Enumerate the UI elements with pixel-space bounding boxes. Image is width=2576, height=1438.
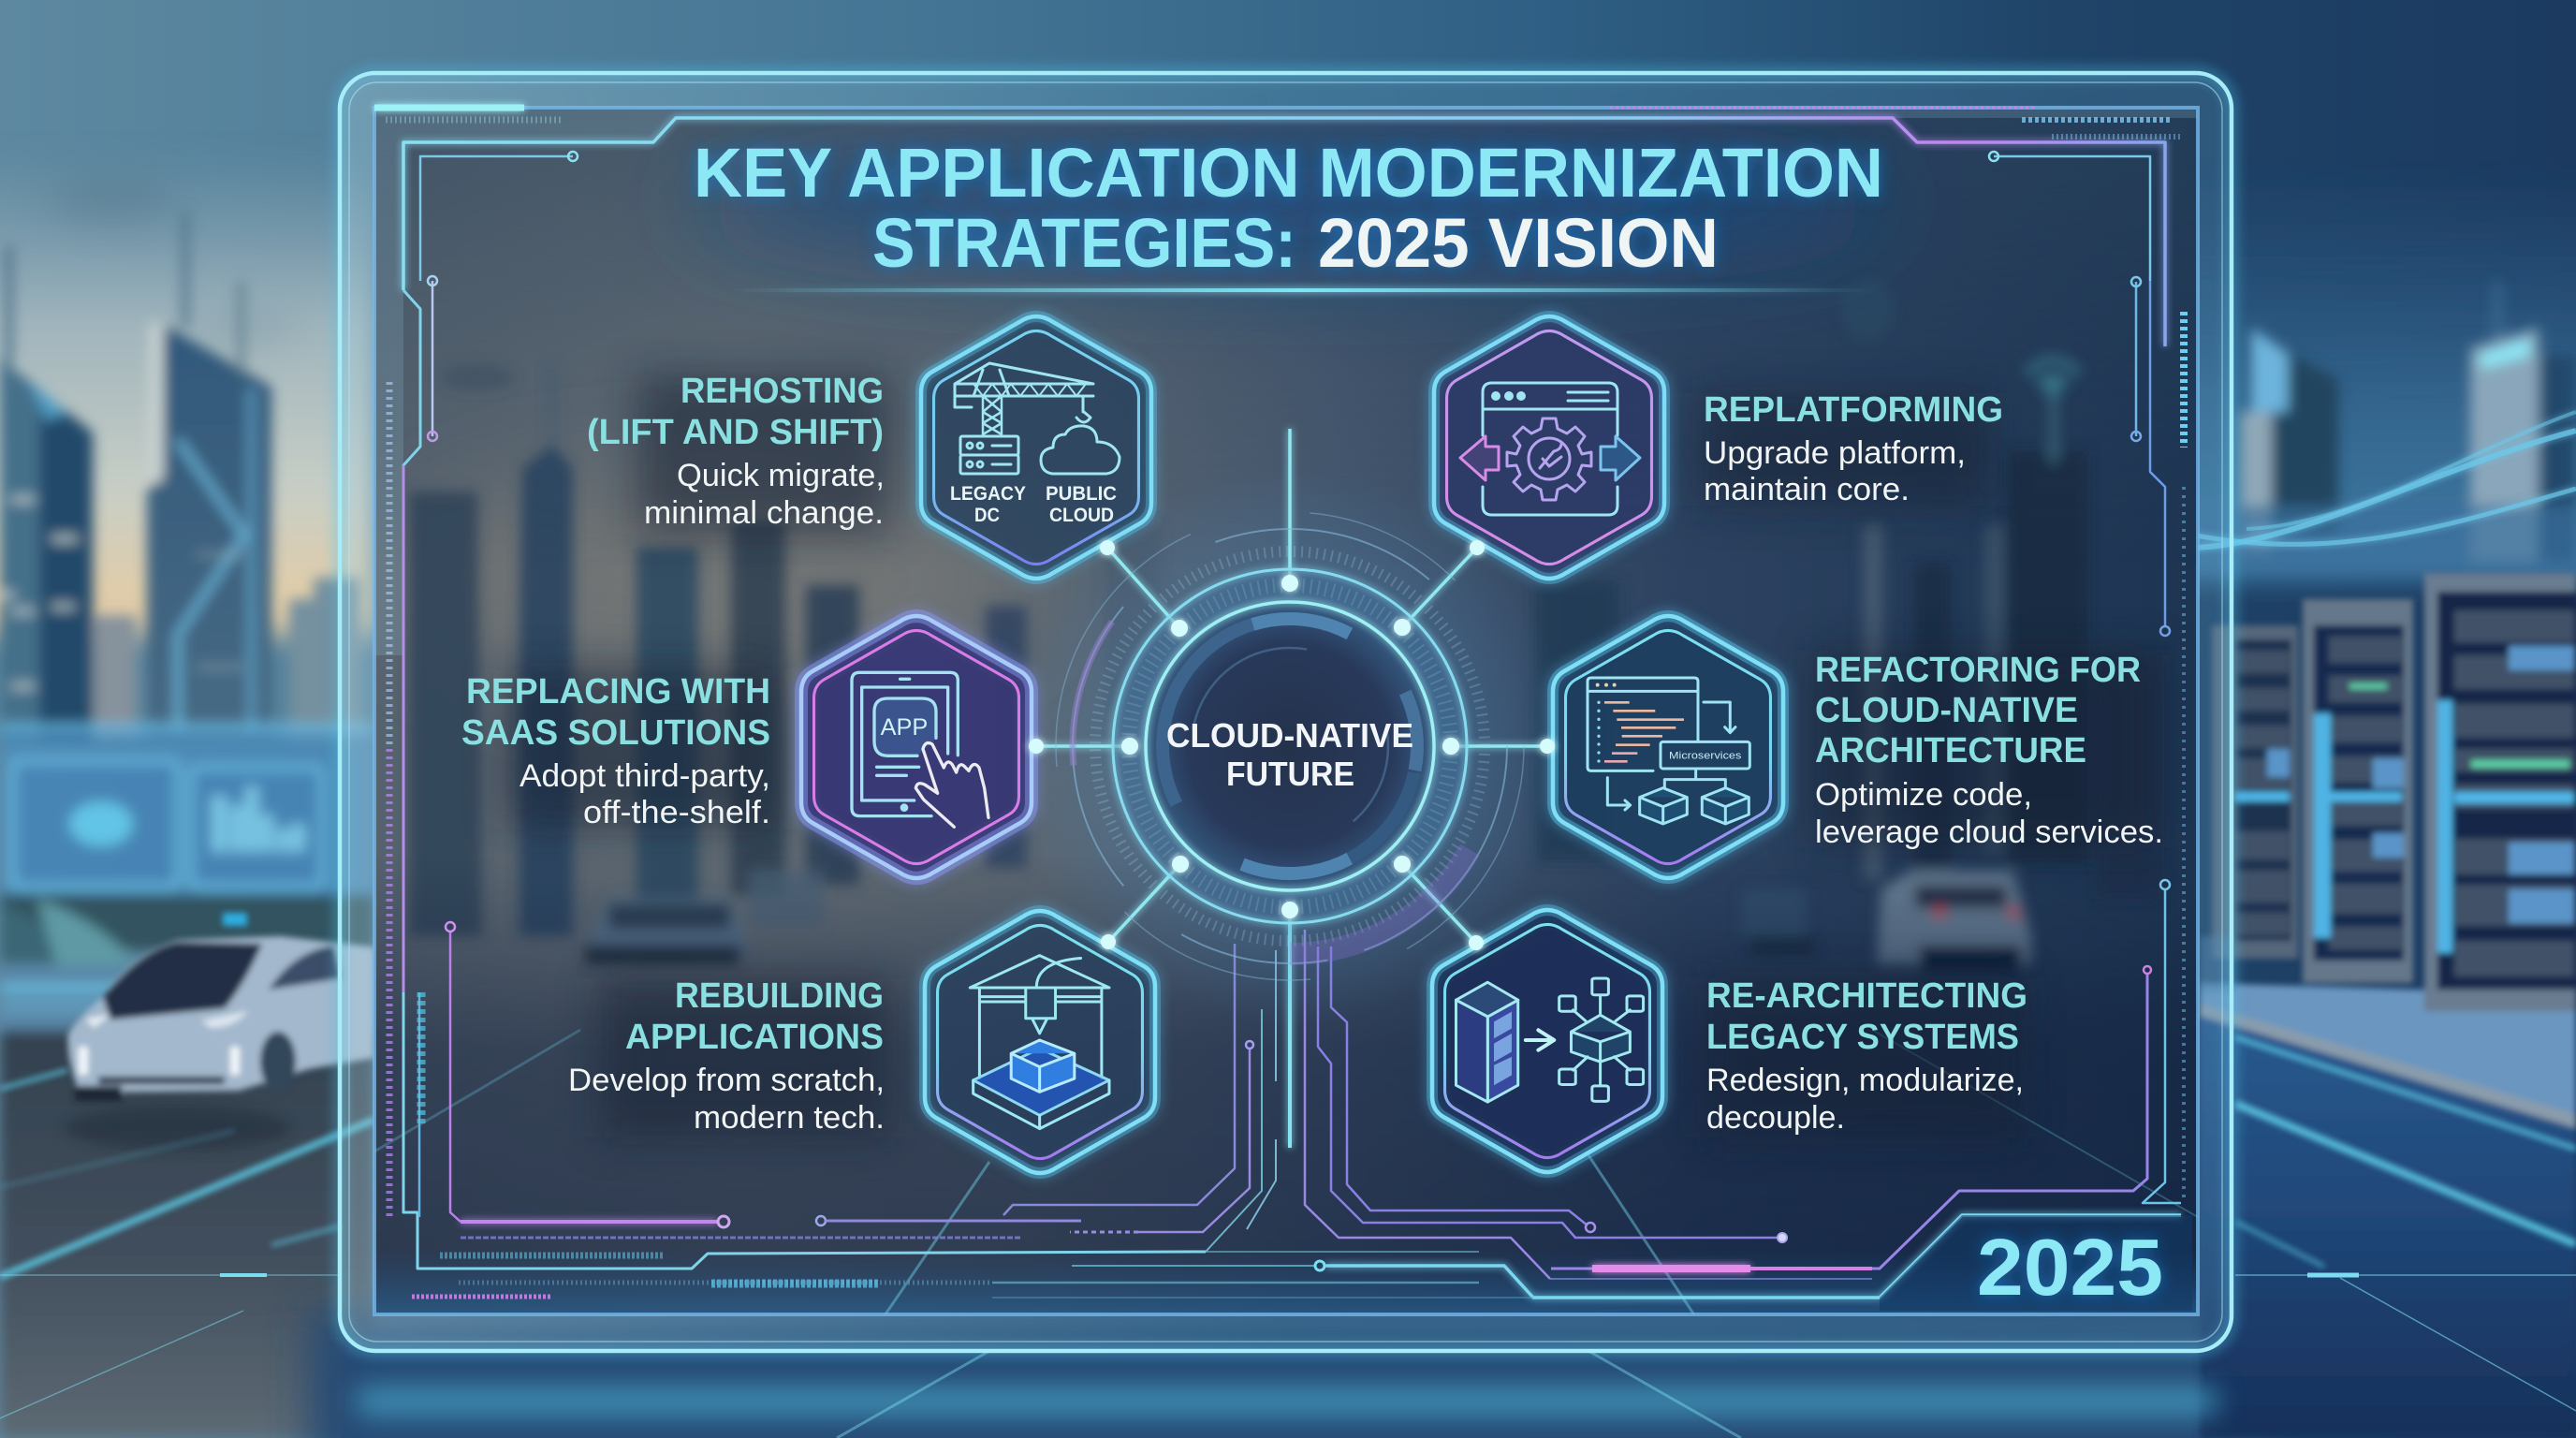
year badge	[1880, 1215, 2192, 1313]
strategy: refactoring	[1553, 616, 2163, 878]
hub glow and connector lines	[1009, 429, 1571, 1027]
racks	[2200, 983, 2576, 1123]
year badge: 2025	[1977, 1224, 2163, 1313]
hexagon badge	[1553, 616, 1783, 878]
re-architecting text: RE-ARCHITECTING	[1706, 976, 2027, 1016]
icon: browser window, gear and arrows	[1460, 383, 1640, 515]
rehosting text: REHOSTING	[681, 372, 884, 411]
re-architecting text: Redesign, modularize,	[1706, 1063, 2024, 1098]
strategy: rebuilding	[568, 911, 1155, 1173]
hub arcs	[1118, 574, 1462, 918]
centre-left traces	[1003, 944, 1235, 1215]
rehosting text	[587, 372, 885, 531]
rebuilding text: APPLICATIONS	[625, 1018, 884, 1057]
refactoring text: REFACTORING FOR	[1815, 651, 2141, 690]
strategy: replatforming	[1434, 316, 2003, 579]
refactoring text: Optimize code,	[1815, 777, 2032, 813]
refactoring text	[1815, 651, 2163, 850]
lit band at base of panel	[374, 1250, 2198, 1314]
icon labels: CLOUD	[1049, 505, 1114, 526]
circuit frame lines	[374, 108, 2184, 1298]
right sky buildings	[2251, 328, 2338, 534]
title: 2025 VISION	[1318, 204, 1719, 282]
strategy: replacing with SaaS	[461, 616, 1032, 878]
refactoring text: leverage cloud services.	[1815, 814, 2163, 850]
replacing text	[461, 672, 770, 830]
replatforming text	[1704, 390, 2003, 507]
sky data streaks	[2196, 412, 2576, 548]
hexagon badge	[1434, 316, 1664, 579]
hexagon badge	[925, 911, 1155, 1173]
base horizontal traces	[1072, 1265, 1314, 1267]
replatforming text: maintain core.	[1704, 472, 1910, 507]
rehosting text: Quick migrate,	[677, 458, 885, 493]
floor under the panel	[309, 1311, 2275, 1438]
icon labels	[950, 483, 1117, 526]
hexagon badge	[801, 616, 1032, 878]
hub label: FUTURE	[1226, 755, 1354, 793]
title	[694, 134, 1883, 282]
icon labels: PUBLIC	[1046, 483, 1117, 505]
hologram band	[0, 726, 374, 894]
road left	[0, 1030, 374, 1438]
icon labels: LEGACY	[950, 483, 1026, 505]
inner dark display area	[374, 108, 2198, 1386]
rebuilding text: REBUILDING	[675, 976, 884, 1016]
hub rings	[1113, 569, 1467, 923]
re-architecting text	[1706, 976, 2027, 1136]
rebuilding text	[568, 976, 885, 1136]
replatforming text: REPLATFORMING	[1704, 390, 2003, 430]
icon: tablet with app and tapping hand: APP	[881, 714, 928, 741]
rehosting text: (LIFT AND SHIFT)	[587, 413, 884, 452]
hexagon badge	[1432, 910, 1662, 1172]
title: KEY APPLICATION MODERNIZATION	[694, 134, 1883, 212]
dark halos behind strategy text	[505, 374, 2158, 1137]
refactoring text: ARCHITECTURE	[1815, 731, 2086, 770]
blurred interior city	[409, 492, 482, 936]
panel reflection	[356, 1387, 2218, 1416]
rehosting text: minimal change.	[644, 495, 884, 531]
icon: 3D printer building a cube	[970, 956, 1109, 1129]
strategy: re-architecting	[1432, 910, 2027, 1172]
icon: tablet with app and tapping hand	[852, 672, 988, 827]
re-architecting text: LEGACY SYSTEMS	[1706, 1018, 2019, 1057]
title: STRATEGIES:	[872, 204, 1296, 282]
glass panel outer frame	[340, 73, 2232, 1351]
hexagon badge	[921, 316, 1151, 579]
hex connector nodes	[1029, 540, 1555, 950]
hub tick rings	[1006, 462, 1573, 1030]
header divider line	[730, 288, 1872, 292]
dotted trims	[459, 1281, 992, 1284]
re-architecting text: decouple.	[1706, 1100, 1845, 1136]
icon: code window, microservices box and cubes: Microservices	[1669, 751, 1742, 762]
title blue haze	[689, 136, 1887, 267]
replatforming text: Upgrade platform,	[1704, 435, 1966, 471]
replacing text: REPLACING WITH	[466, 672, 770, 712]
icon labels: DC	[974, 505, 1000, 526]
hub label	[1166, 716, 1413, 793]
rebuilding text: modern tech.	[694, 1100, 885, 1136]
rebuilding text: Develop from scratch,	[568, 1063, 885, 1098]
icon: crane, server and cloud	[955, 363, 1120, 474]
thin perspective streaks	[374, 1030, 2198, 1386]
icon: code window, microservices box and cubes	[1588, 678, 1749, 824]
light trails on road	[0, 1037, 2576, 1277]
strategy: rehosting	[587, 316, 1151, 579]
replacing text: SAAS SOLUTIONS	[461, 713, 770, 753]
car	[67, 936, 374, 1093]
warm horizon haze	[476, 473, 1017, 674]
centre-right traces	[1305, 930, 1550, 1279]
icon: monolith to modular nodes	[1456, 978, 1644, 1102]
central hub: cloud-native future	[1006, 462, 1573, 1030]
left skyline	[0, 359, 93, 740]
refactoring text: CLOUD-NATIVE	[1815, 691, 2078, 730]
blurred cars	[590, 899, 749, 955]
hub label: CLOUD-NATIVE	[1166, 716, 1413, 755]
lighter glass trim around the display	[374, 108, 2198, 655]
replacing text: Adopt third-party,	[520, 758, 770, 794]
replacing text: off-the-shelf.	[583, 795, 770, 830]
